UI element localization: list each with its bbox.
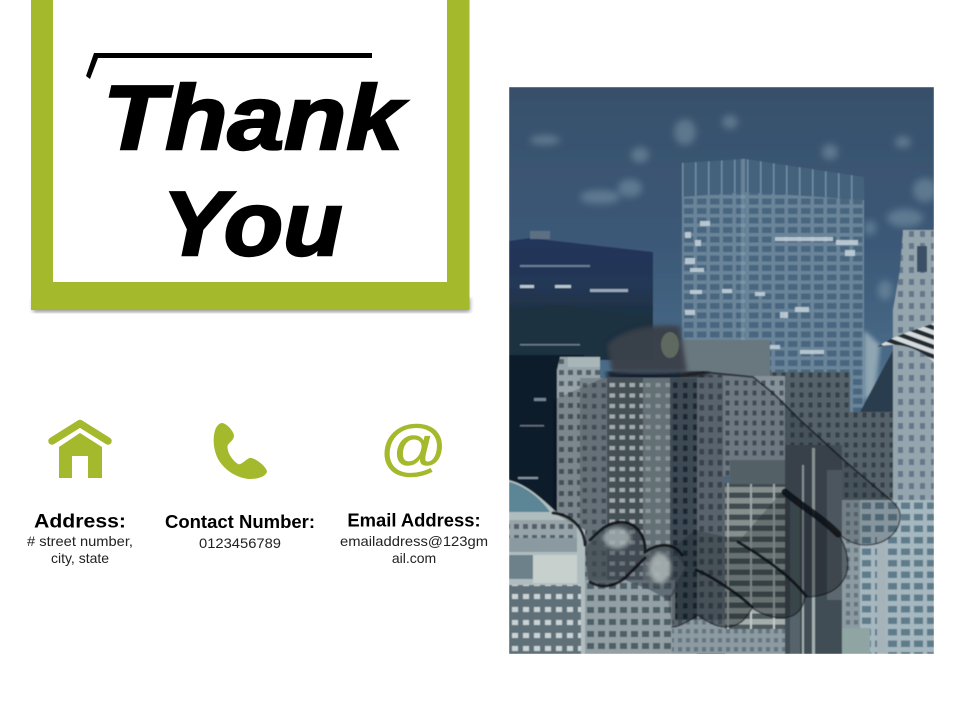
right art-deco building: [893, 230, 934, 520]
text block: address: [27, 510, 133, 566]
handshake: thumb and fingertips: [585, 522, 685, 600]
frame shadow: [33, 298, 470, 312]
text block: address: city, state: [51, 550, 109, 566]
text block: email address: Email Address:: [347, 510, 481, 530]
text block: address: Address:: [34, 510, 126, 532]
lower-bright far buildings: [585, 580, 675, 654]
striped cuff: [877, 323, 934, 362]
lower-right blue building: [860, 500, 934, 654]
title: Thank: [103, 68, 408, 169]
icon: phone: [214, 423, 267, 479]
icon: at sign: @: [380, 414, 448, 482]
central tower: [682, 159, 864, 420]
icon: house: [52, 424, 108, 478]
lower-left light dome building: [509, 480, 585, 654]
text block: contact number: [165, 511, 315, 551]
text block: contact number: Contact Number:: [165, 511, 315, 532]
panel: green thank-you frame: [31, 0, 470, 312]
tall left tower: [556, 356, 601, 526]
text block: email address: emailaddress@123gm: [340, 533, 488, 549]
text block: email address: [340, 510, 488, 566]
striped mid block: [724, 482, 786, 630]
photo: handshake over city skyline: [509, 87, 937, 655]
dark triangular roof: [860, 350, 893, 412]
handshake: combined hand shadow: [553, 372, 900, 627]
clouds: [530, 115, 937, 300]
building behind the wrist: [680, 340, 770, 378]
handshake: dark creases: [553, 372, 900, 627]
title: You: [162, 174, 342, 275]
windowed block right of apartments: [723, 376, 785, 476]
text block: email address: ail.com: [392, 550, 436, 566]
text block: address: # street number,: [27, 533, 133, 549]
dark tall slab: [785, 445, 842, 654]
dim building under roof: [850, 412, 893, 507]
text block: contact number: 0123456789: [199, 535, 281, 551]
forearm buildings: [770, 372, 850, 510]
pale cloud gap beside tower: [864, 330, 880, 400]
accent line above title: [86, 53, 372, 79]
sky: [509, 87, 934, 484]
dark glass building: [509, 231, 653, 525]
green frame: [31, 0, 470, 310]
handshake: darker finger band: [668, 488, 848, 627]
grey apartment blocks: [580, 378, 608, 580]
handshake: wrist shadow: [607, 325, 687, 372]
title: [103, 68, 408, 275]
